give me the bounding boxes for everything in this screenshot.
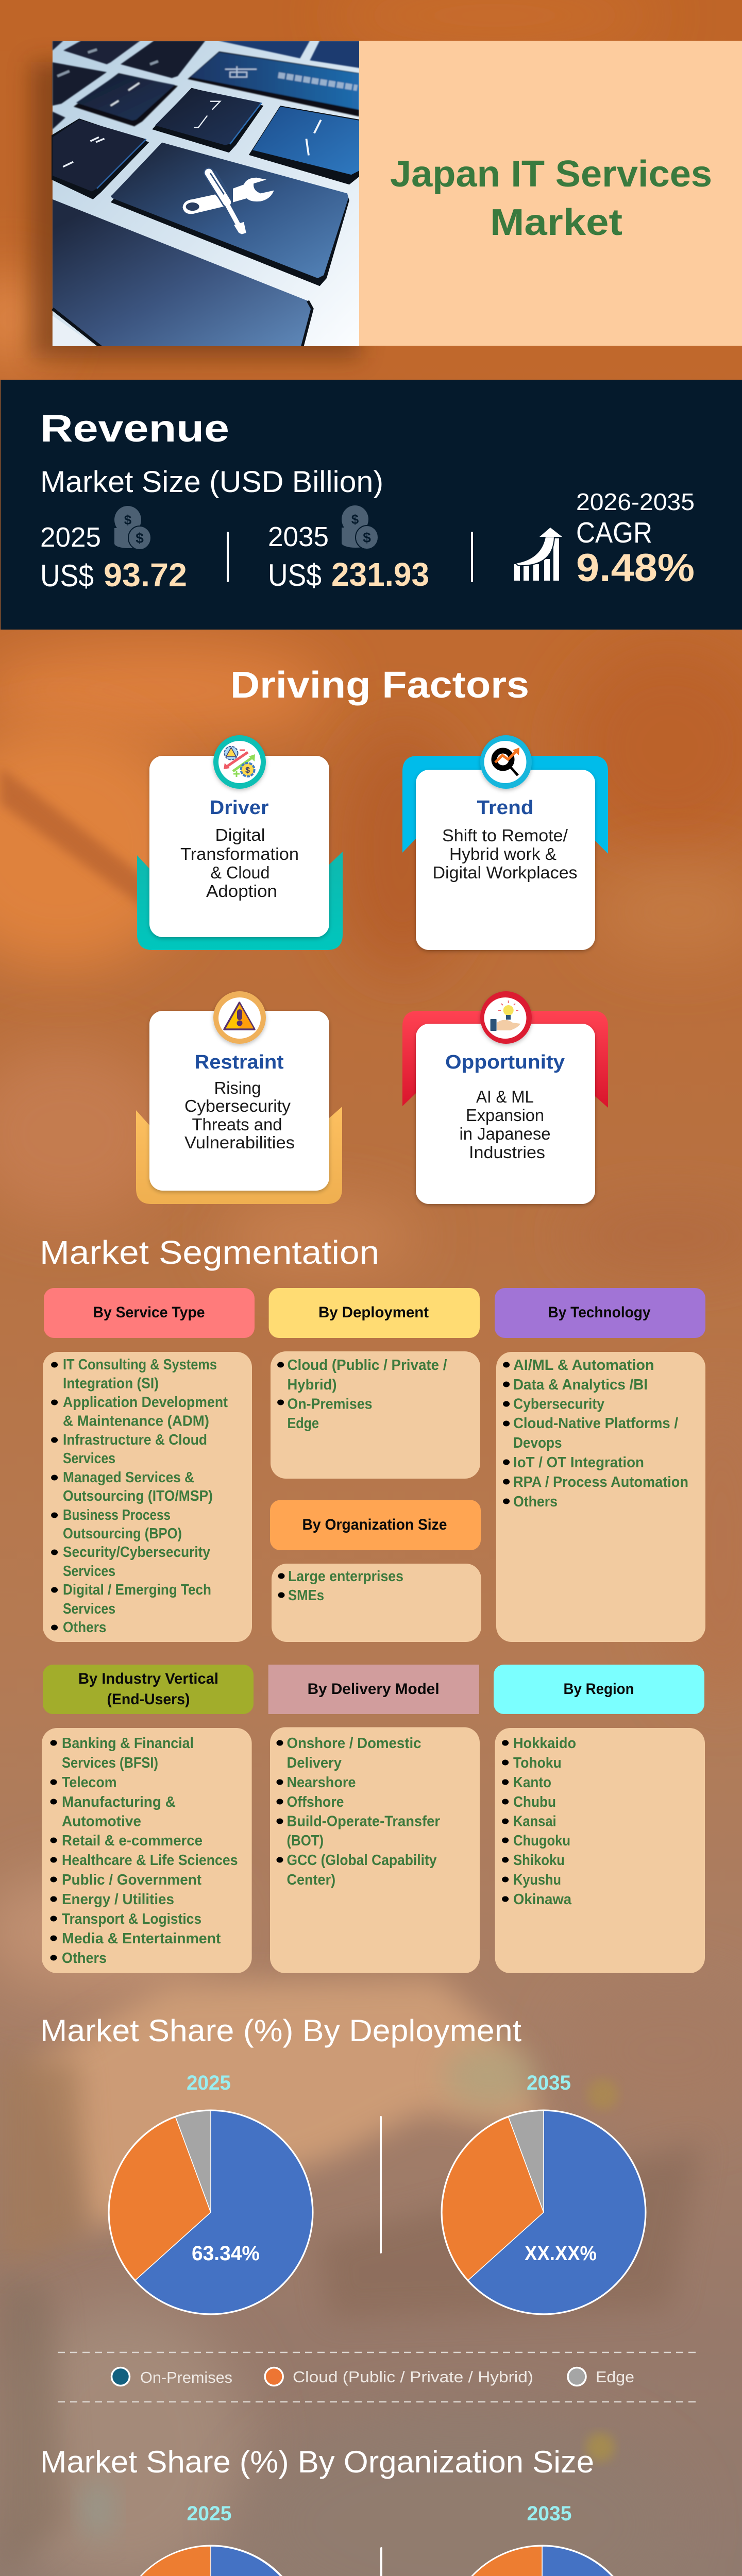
header: by technology: By Technology <box>548 1304 651 1321</box>
list: deployment <box>271 1351 480 1479</box>
icon: coins 2025: $ <box>136 530 144 546</box>
icon: trend <box>480 735 532 789</box>
text: trend description: Hybrid work & <box>449 844 556 863</box>
list: technology: RPA / Process Automation <box>513 1474 688 1490</box>
header: by organization size: By Organization Size <box>302 1516 447 1533</box>
list: technology: Data & Analytics /BI <box>513 1377 648 1393</box>
value 2035 <box>268 521 429 593</box>
list: technology: Cloud-Native Platforms / <box>513 1415 678 1432</box>
text: trend description: Shift to Remote/ <box>442 826 568 845</box>
CAGR <box>576 488 695 590</box>
header: by industry vertical: (End-Users) <box>107 1691 190 1708</box>
header: by technology <box>495 1288 705 1338</box>
title panel <box>359 41 742 346</box>
divider <box>227 532 229 582</box>
list: service type: Outsourcing (ITO/MSP) <box>63 1488 213 1504</box>
list: region: Tohoku <box>513 1755 562 1771</box>
list: industry vertical: Services (BFSI) <box>62 1755 158 1771</box>
icon: opportunity <box>480 991 532 1044</box>
text: driver description: Transformation <box>180 844 299 863</box>
list: industry vertical: Public / Government <box>62 1872 201 1888</box>
header: by delivery model <box>268 1665 479 1714</box>
label: trend: Trend <box>477 797 534 819</box>
year label 2035: 2035 <box>527 2502 572 2525</box>
icon: growth arrow <box>514 528 562 581</box>
list: service type: Outsourcing (BPO) <box>63 1526 182 1542</box>
list: industry vertical: Automotive <box>62 1814 141 1830</box>
text: restraint description: Cybersecurity <box>184 1096 291 1115</box>
text: opportunity description: in Japanese <box>460 1124 550 1143</box>
icon: coins 2025: $ <box>124 512 132 528</box>
pie chart: organization size 2035 <box>445 2545 639 2576</box>
text: restraint description: Threats and <box>192 1115 282 1134</box>
list: organization size: Large enterprises <box>288 1568 403 1585</box>
list: technology: Devops <box>513 1435 562 1451</box>
list: region: Hokkaido <box>513 1735 576 1752</box>
legend: deployment: Cloud (Public / Private / Hybrid) <box>293 2368 533 2386</box>
list: industry vertical: Energy / Utilities <box>62 1891 174 1908</box>
value 2025 <box>40 522 187 594</box>
text: opportunity description: Expansion <box>466 1106 544 1125</box>
panel: opportunity <box>402 991 608 1204</box>
list: region: Okinawa <box>513 1891 572 1908</box>
list: industry vertical: Media & Entertainment <box>62 1930 221 1947</box>
list: service type: Business Process <box>63 1507 171 1523</box>
list: region: Chubu <box>513 1794 556 1810</box>
list: industry vertical: Others <box>62 1950 107 1967</box>
list: service type: Services <box>63 1601 115 1617</box>
value 2025: US$ <box>40 558 94 593</box>
legend: deployment: On-Premises <box>140 2368 232 2386</box>
value 2025: 93.72 <box>104 556 187 594</box>
list: industry vertical: Healthcare & Life Sciences <box>62 1852 238 1869</box>
list: delivery model: (BOT) <box>286 1833 324 1849</box>
value 2025: 2025 <box>40 522 101 553</box>
CAGR: 9.48% <box>576 546 695 590</box>
label: opportunity: Opportunity <box>445 1052 565 1073</box>
heading: market segmentation: Market Segmentation <box>40 1234 379 1271</box>
list: service type: Infrastructure & Cloud <box>63 1432 207 1448</box>
list: organization size <box>272 1564 481 1642</box>
CAGR: CAGR <box>576 516 652 549</box>
heading: revenue: Revenue <box>40 407 229 450</box>
list: service type: Integration (SI) <box>63 1376 159 1392</box>
text: driver description: Adoption <box>206 882 277 901</box>
pie chart: deployment 2025 <box>108 2109 313 2315</box>
list: service type: Application Development <box>63 1394 228 1411</box>
heading: market share by organization size: Market Share (%) By Organization Size <box>40 2445 594 2479</box>
divider <box>380 2547 382 2576</box>
list: technology: Cybersecurity <box>513 1396 604 1413</box>
list: delivery model <box>270 1727 480 1973</box>
text: restraint description <box>184 1078 295 1152</box>
icon: restraint <box>213 991 266 1044</box>
text: restraint description: Rising <box>214 1078 261 1097</box>
list: service type <box>43 1352 252 1642</box>
panel: driver <box>137 735 343 950</box>
list: delivery model: Nearshore <box>286 1774 356 1791</box>
label: restraint: Restraint <box>195 1052 284 1073</box>
label: driver: Driver <box>209 797 269 819</box>
list: region: Kyushu <box>513 1872 561 1888</box>
header: by deployment: By Deployment <box>318 1304 429 1321</box>
list: industry vertical: Retail & e-commerce <box>62 1833 203 1849</box>
list: delivery model: Center) <box>286 1872 335 1888</box>
icon: coins 2035: $ <box>351 512 359 527</box>
year label 2025: 2025 <box>187 2502 232 2525</box>
list: industry vertical: Telecom <box>62 1774 116 1791</box>
list: service type: Managed Services & <box>63 1469 194 1486</box>
header: by service type: By Service Type <box>93 1304 205 1321</box>
list: region: Shikoku <box>513 1852 565 1869</box>
CAGR: 2026-2035 <box>576 488 695 515</box>
header: by industry vertical <box>43 1665 254 1714</box>
value 2035: US$ <box>268 558 322 592</box>
list: service type: Digital / Emerging Tech <box>63 1582 211 1598</box>
pie chart: deployment 2035: XX.XX% <box>525 2242 597 2265</box>
panel: restraint <box>136 991 342 1204</box>
list: region: Chugoku <box>513 1833 570 1849</box>
panel: trend <box>402 735 608 950</box>
list: service type: Services <box>63 1563 115 1580</box>
header: by organization size <box>270 1500 481 1550</box>
list: deployment: Edge <box>288 1415 319 1432</box>
list: region: Kansai <box>513 1814 556 1830</box>
text: opportunity description: AI & ML <box>476 1087 534 1106</box>
list: organization size: SMEs <box>288 1587 324 1604</box>
list: technology <box>496 1352 705 1642</box>
list: industry vertical: Banking & Financial <box>62 1735 194 1752</box>
icon: driver <box>213 735 266 789</box>
list: delivery model: GCC (Global Capability <box>286 1852 437 1869</box>
list: service type: Others <box>63 1619 106 1636</box>
icon: coins 2035 <box>342 505 378 549</box>
list: deployment: Cloud (Public / Private / <box>288 1357 447 1374</box>
header: by industry vertical: By Industry Vertical <box>78 1670 218 1687</box>
pie chart: organization size 2025 <box>114 2545 308 2576</box>
text: trend description <box>433 826 577 882</box>
legend: deployment: Edge <box>596 2368 634 2386</box>
revenue band <box>1 380 742 630</box>
text: driver description: & Cloud <box>210 863 270 882</box>
list: delivery model: Onshore / Domestic <box>286 1735 421 1752</box>
divider <box>380 2116 382 2253</box>
value 2035: 231.93 <box>331 556 429 593</box>
list: industry vertical <box>42 1728 252 1973</box>
list: service type: Security/Cybersecurity <box>63 1544 210 1561</box>
list: service type: Services <box>63 1450 115 1467</box>
text: opportunity description: Industries <box>469 1143 545 1162</box>
title panel: Japan IT Services <box>390 154 712 195</box>
heading: driving factors: Driving Factors <box>230 665 529 706</box>
list: region: Kanto <box>513 1774 551 1791</box>
list: deployment: On-Premises <box>288 1396 372 1413</box>
legend: deployment <box>58 2352 700 2402</box>
list: industry vertical: Manufacturing & <box>62 1794 176 1810</box>
list: technology: AI/ML & Automation <box>513 1357 654 1374</box>
list: technology: Others <box>513 1494 558 1510</box>
heading: market share by deployment: Market Share (%) By Deployment <box>40 2013 521 2048</box>
divider <box>471 532 473 582</box>
icon: driver: $ <box>245 766 250 775</box>
header: by service type <box>44 1288 255 1338</box>
header: by region <box>494 1665 704 1714</box>
icon: coins 2035: $ <box>363 530 371 546</box>
header: by delivery model: By Delivery Model <box>308 1681 440 1698</box>
header: by region: By Region <box>564 1681 634 1698</box>
header: by deployment <box>269 1288 480 1338</box>
list: industry vertical: Transport & Logistics <box>62 1911 201 1927</box>
value 2035: 2035 <box>268 521 329 552</box>
text: driver description: Digital <box>215 825 265 844</box>
title panel: Market <box>490 202 622 243</box>
list: delivery model: Delivery <box>286 1755 342 1771</box>
list: delivery model: Offshore <box>286 1794 344 1810</box>
subheading: market size: Market Size (USD Billion) <box>40 465 383 499</box>
year label 2025: 2025 <box>187 2072 231 2094</box>
text: restraint description: Vulnerabilities <box>184 1133 295 1152</box>
list: delivery model: Build-Operate-Transfer <box>286 1814 440 1830</box>
text: opportunity description <box>460 1087 550 1162</box>
list: deployment: Hybrid) <box>288 1377 337 1393</box>
text: trend description: Digital Workplaces <box>433 863 577 882</box>
list: service type: & Maintenance (ADM) <box>63 1413 209 1429</box>
icon: coins 2025 <box>114 506 151 550</box>
header image: keyboard with tools key <box>31 41 361 358</box>
list: technology: IoT / OT Integration <box>513 1454 644 1471</box>
year label 2035: 2035 <box>527 2072 571 2094</box>
pie chart: deployment 2025: 63.34% <box>192 2242 260 2265</box>
text: driver description <box>180 825 299 901</box>
pie chart: deployment 2035 <box>441 2109 646 2315</box>
list: region <box>495 1728 705 1973</box>
list: service type: IT Consulting & Systems <box>63 1357 217 1373</box>
